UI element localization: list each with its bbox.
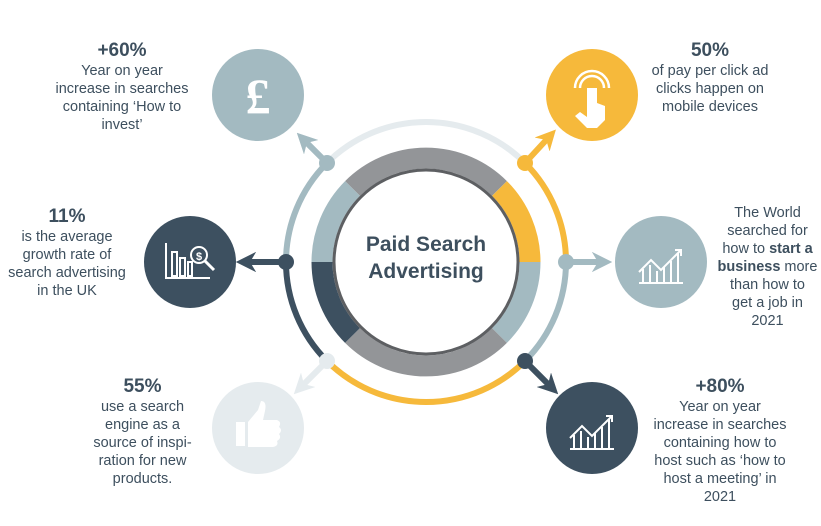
- text: 11%: in the UK: [37, 283, 97, 299]
- text: 50%: 50%: [691, 40, 729, 61]
- text: 55%: source of inspi-: [93, 435, 192, 451]
- center title: Paid Search: [366, 233, 486, 256]
- text: 55%: 55%: [123, 376, 162, 397]
- text: start a business: searched for: [727, 223, 808, 239]
- text: +80%: [654, 376, 786, 505]
- text: +80%: host a meeting’ in: [663, 471, 777, 487]
- icon: chart search: $: [196, 251, 202, 263]
- icon: growth chart dark: [546, 382, 638, 474]
- text: start a business: 2021: [751, 313, 784, 329]
- text: 50%: of pay per click ad: [652, 63, 768, 79]
- text: +60%: invest’: [101, 117, 143, 133]
- icon: thumbs up: [212, 382, 304, 474]
- icon: pound: [212, 49, 304, 141]
- text: start a business: business more: [718, 259, 817, 275]
- text: start a business: than how to: [730, 277, 805, 293]
- text: 55%: products.: [113, 471, 172, 487]
- text: 11%: is the average: [21, 229, 113, 245]
- center title: [366, 233, 486, 283]
- dots: [278, 155, 574, 369]
- icon: pound: £: [246, 68, 270, 124]
- text: start a business: get a job in: [732, 295, 803, 311]
- text: +60%: [56, 40, 188, 133]
- icon: chart search: [144, 216, 236, 308]
- text: +60%: Year on year: [81, 63, 163, 79]
- text: 50%: [652, 40, 768, 115]
- center title: Advertising: [368, 260, 484, 283]
- text: +80%: 2021: [704, 489, 736, 505]
- text: 55%: use a search: [101, 399, 184, 415]
- text: +80%: host such as ‘how to: [654, 453, 786, 469]
- text: +80%: increase in searches: [654, 417, 786, 433]
- arrows: [246, 137, 602, 387]
- text: 11%: search advertising: [8, 265, 126, 281]
- text: 55%: [93, 376, 192, 487]
- icon: growth chart light: [615, 216, 707, 308]
- segmented ring: [322, 158, 530, 366]
- text: start a business: The World: [734, 205, 801, 221]
- text: 50%: clicks happen on: [656, 81, 764, 97]
- text: 50%: mobile devices: [662, 99, 758, 115]
- text: +60%: increase in searches: [56, 81, 188, 97]
- icon: hand tap: [546, 49, 638, 141]
- text: 11%: growth rate of: [23, 247, 111, 263]
- text: +80%: Year on year: [679, 399, 761, 415]
- text: start a business: how to start a: [722, 241, 813, 257]
- text: 55%: engine as a: [105, 417, 180, 433]
- text: +60%: containing ‘How to: [63, 99, 181, 115]
- text: +60%: +60%: [97, 40, 147, 61]
- text: 55%: ration for new: [99, 453, 186, 469]
- text: start a business: [718, 205, 817, 329]
- text: 11%: 11%: [48, 206, 85, 227]
- text: +80%: containing how to: [664, 435, 776, 451]
- outer ring: [286, 122, 566, 402]
- text: 11%: [8, 206, 126, 299]
- text: +80%: +80%: [695, 376, 745, 397]
